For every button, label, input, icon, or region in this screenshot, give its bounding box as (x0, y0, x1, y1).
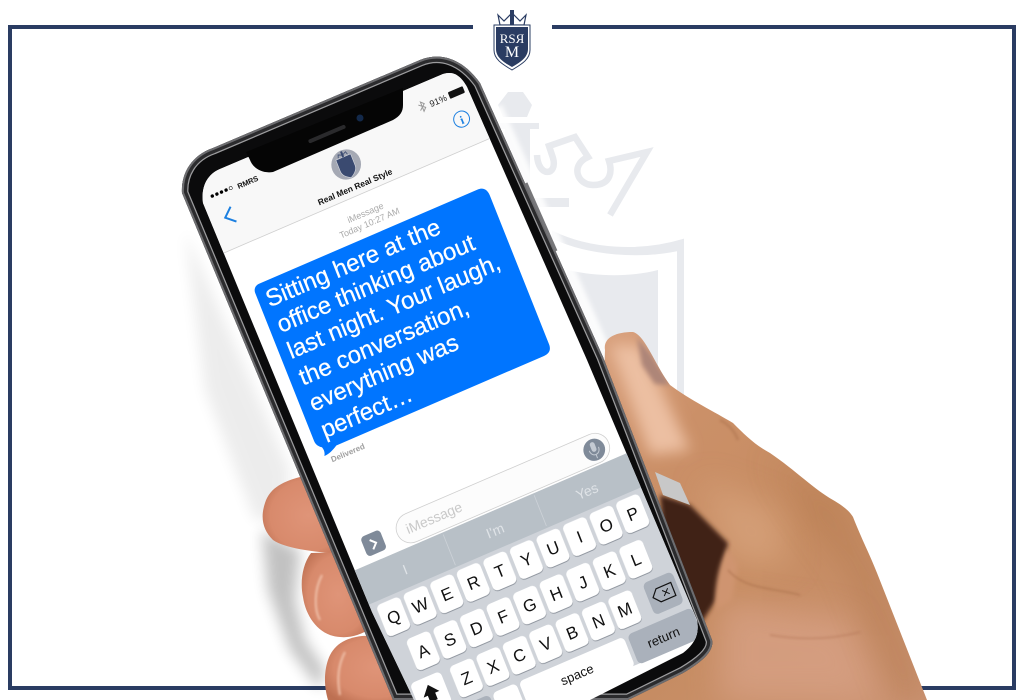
message input (396, 432, 610, 544)
hand: middle finger crease (316, 575, 322, 620)
hand: ring finger crease (338, 652, 345, 695)
phone shadow (185, 230, 290, 520)
key row 2: S (441, 629, 459, 651)
phone (172, 27, 716, 700)
key row 3: N (590, 610, 608, 633)
finger shadows (262, 530, 325, 690)
message bubble: everything was (305, 329, 462, 417)
key row 3: M (615, 599, 635, 622)
expand button (361, 530, 386, 556)
key row 2: K (601, 560, 619, 582)
key row 3 (410, 571, 684, 700)
hand: middle finger (302, 552, 368, 637)
phone metal edges (182, 57, 712, 700)
back arrow (224, 206, 237, 222)
status bar left (210, 176, 258, 198)
key row 1: Y (518, 549, 535, 571)
key row 3: C (510, 644, 529, 667)
contact avatar (331, 149, 361, 180)
watermark: faded crest (498, 92, 683, 500)
status bar left: RMRS (236, 174, 260, 191)
key row 4 (476, 608, 698, 700)
key row 3: X (484, 656, 502, 678)
contact name: Real Men Real Style (316, 166, 394, 207)
key row 1: E (438, 583, 456, 605)
phone body (182, 57, 712, 700)
timestamp: Today 10:27 AM (338, 206, 401, 240)
key row 2: F (495, 606, 512, 628)
key row 2: L (628, 549, 644, 570)
key row 2: D (468, 617, 486, 640)
key row 1: U (544, 537, 562, 560)
key row 1: P (624, 503, 642, 525)
message input: iMessage (403, 498, 465, 537)
info icon (453, 110, 470, 128)
key row 4: space (558, 661, 596, 688)
delivered label: Delivered (330, 442, 366, 464)
key row 1: R (464, 572, 483, 594)
hand: gap between thumb and palm (655, 472, 690, 505)
hand: index finger (263, 477, 345, 554)
timestamp: iMessage (346, 201, 385, 225)
message bubble: office thinking about (273, 229, 479, 339)
key row 1: I (574, 527, 586, 547)
message bubble: perfect… (317, 380, 417, 444)
glow beside phone over watermark (490, 110, 610, 380)
message bubble: last night. Your laugh, (283, 249, 504, 365)
key row 1: O (597, 514, 616, 537)
key row 3: Z (458, 668, 475, 689)
message bubble (253, 186, 554, 458)
logo: crest: RSЯ (500, 31, 525, 46)
logo: crest (494, 10, 530, 70)
predictive bar: Yes (574, 479, 600, 503)
key row 3: B (564, 622, 581, 644)
key row 1: T (492, 561, 508, 582)
predictive bar: I (400, 561, 410, 578)
predictive bar (354, 454, 641, 604)
hand: palm and thumb (560, 332, 927, 700)
hand (263, 332, 927, 700)
key row 2: G (520, 594, 539, 617)
key row 2: H (547, 583, 566, 605)
predictive bar: I'm (484, 520, 506, 542)
key row 4: return (645, 624, 682, 651)
key row 2 (405, 538, 654, 672)
key row 3: V (537, 633, 555, 655)
logo: crest: M (505, 44, 519, 61)
key row 1: Q (384, 606, 403, 629)
key row 1 (376, 493, 651, 638)
keyboard (354, 454, 698, 700)
hand: ring finger (325, 635, 420, 700)
message bubble: Sitting here at the (262, 214, 445, 313)
key row 2: J (576, 572, 590, 593)
status bar right (418, 86, 465, 112)
message bubble: the conversation, (295, 294, 473, 391)
side button (526, 183, 556, 251)
status bar right: 91% (428, 93, 448, 109)
screen (202, 73, 698, 700)
info icon: i (458, 113, 467, 127)
nav bar (202, 73, 490, 254)
notch (246, 88, 403, 172)
key row 2: A (415, 640, 433, 662)
key row 1: W (410, 594, 431, 618)
